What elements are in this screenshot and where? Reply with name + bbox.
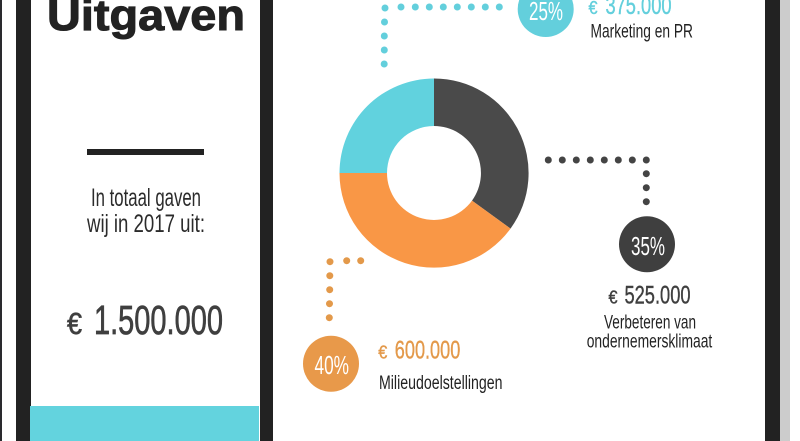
environment amount: € [378, 342, 387, 362]
heading divider [87, 149, 204, 155]
donut chart [339, 78, 529, 268]
teal percent badge [518, 0, 574, 37]
climate amount: € [608, 287, 618, 307]
intro text: In totaal gaven [91, 184, 201, 212]
orange percent badge: 40% [314, 350, 349, 380]
orange percent badge [303, 336, 359, 392]
callout: climate 35% [545, 156, 713, 352]
environment label: Milieudoelstellingen [379, 372, 502, 394]
total amount: 1.500.000 [94, 297, 223, 343]
climate amount: 525.000 [624, 281, 690, 309]
dark percent badge: 35% [631, 231, 665, 261]
marketing amount [588, 0, 672, 20]
climate label: Verbeteren van [604, 311, 696, 333]
climate label: ondernemersklimaat [587, 330, 713, 352]
dark percent badge [619, 216, 675, 272]
teal dotted connector [381, 4, 503, 68]
callout: environment 40% [303, 257, 502, 394]
total amount: € [67, 306, 82, 341]
callout: marketing 25% [381, 0, 693, 68]
dark dotted connector [545, 156, 650, 205]
marketing label: Marketing en PR [590, 20, 693, 42]
orange dotted connector [326, 257, 364, 321]
climate amount [608, 281, 690, 309]
environment amount [378, 336, 460, 364]
total amount [67, 297, 223, 343]
teal footer block [30, 406, 259, 441]
intro text: wij in 2017 uit: [86, 210, 205, 238]
panel: total spending [30, 0, 259, 441]
environment amount: 600.000 [395, 336, 460, 364]
climate label [587, 311, 713, 352]
intro text [86, 184, 205, 238]
